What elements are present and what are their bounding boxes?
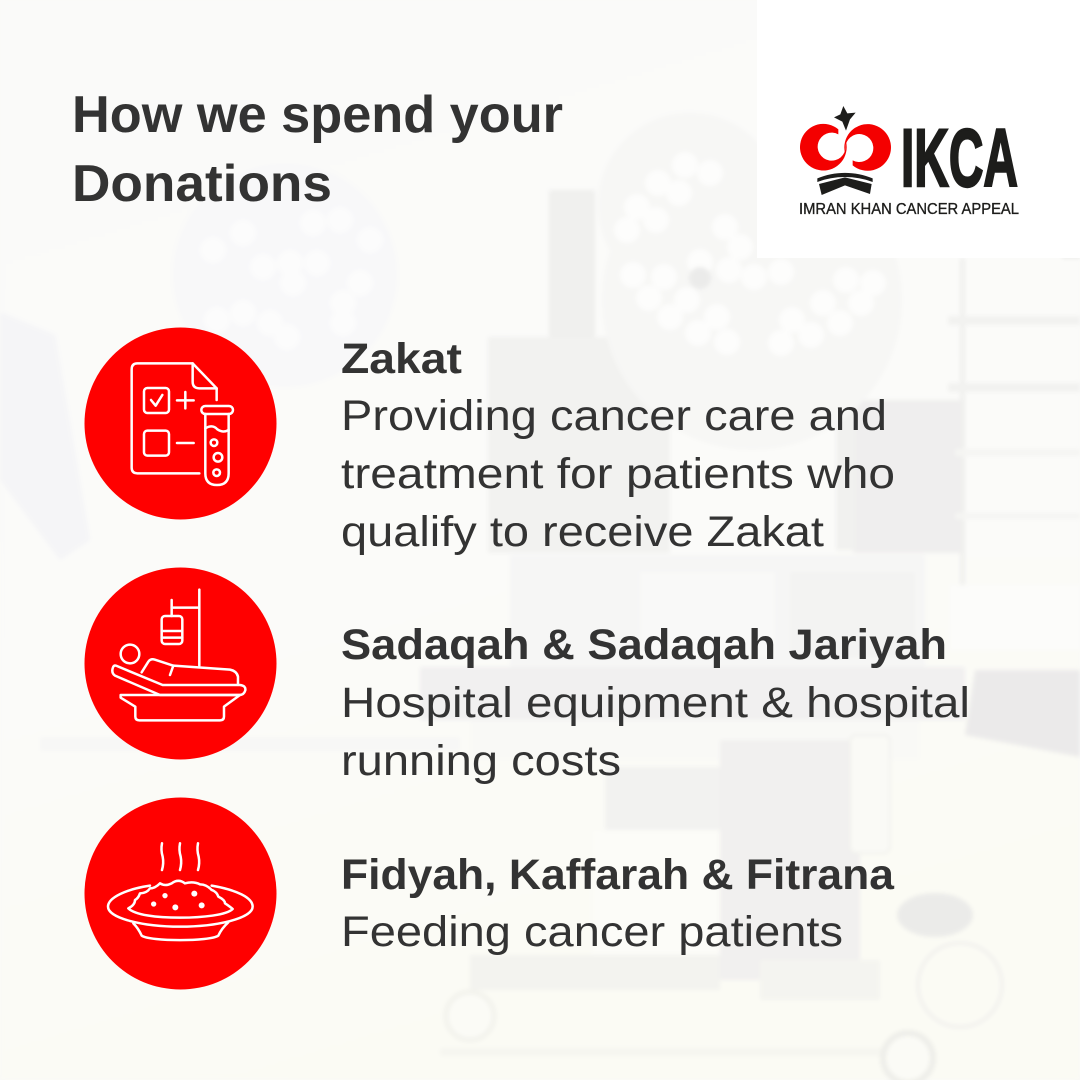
icon: patient in hospital bed — [84, 568, 276, 760]
text block: Sadaqah — [341, 621, 970, 785]
text block: Zakat: treatment for patients who — [341, 450, 895, 498]
text block: Fidyah: Feeding cancer patients — [341, 908, 843, 956]
title: Donations — [72, 155, 332, 213]
text block: Fidyah — [341, 851, 895, 956]
text block: Sadaqah: Hospital equipment & hospital — [341, 679, 970, 727]
logo panel — [757, 0, 1080, 258]
logo tagline: IMRAN KHAN CANCER APPEAL — [799, 201, 1019, 218]
logo red crescents — [800, 124, 891, 171]
text block: Zakat: qualify to receive Zakat — [341, 508, 824, 556]
logo chevrons — [817, 173, 873, 195]
icon: document and test tube — [84, 328, 276, 520]
text block: Zakat: Zakat — [341, 335, 462, 383]
icon: steaming plate of food — [84, 798, 276, 990]
logo star — [834, 106, 856, 131]
text block: Fidyah: Fidyah, Kaffarah & Fitrana — [341, 851, 895, 899]
text block: Sadaqah: running costs — [341, 737, 621, 785]
text block: Sadaqah: Sadaqah & Sadaqah Jariyah — [341, 621, 947, 669]
title — [72, 86, 563, 213]
text block: Zakat — [341, 335, 895, 556]
title: How we spend your — [72, 86, 563, 144]
food grains — [151, 891, 205, 910]
text block: Zakat: Providing cancer care and — [341, 392, 887, 440]
logo: IKCA — [799, 106, 1019, 218]
